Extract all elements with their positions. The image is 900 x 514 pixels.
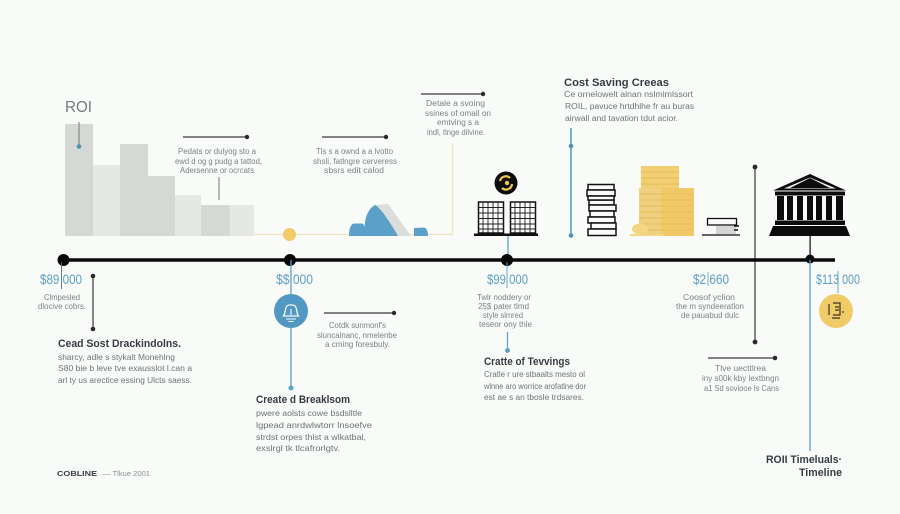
icon: blue mountains xyxy=(349,204,428,236)
milestone 5 value: $113 000 xyxy=(816,271,860,287)
callout: top centre note: emtving s a xyxy=(437,118,480,127)
callout: top centre note: Detale a svoing xyxy=(426,99,485,108)
milestone 3 value xyxy=(487,262,528,288)
milestone 4 note: the m syndeeratlon xyxy=(676,302,744,311)
icon: stacked books xyxy=(587,184,616,236)
callout: top centre note: indl, tlnge dilvine. xyxy=(427,128,485,137)
text block: crate of tevvings xyxy=(483,356,586,402)
milestone 1 value xyxy=(40,262,82,289)
timeline axis xyxy=(58,254,835,266)
callout: milestone 4 lower note: iny s00k kby lextbngn xyxy=(702,374,779,383)
icon: yellow badge xyxy=(819,294,853,328)
connector: milestone 2 xyxy=(288,260,294,390)
connector: milestone 1 xyxy=(91,274,95,331)
milestone 3 note xyxy=(477,293,533,353)
callout: milestone 2 note: Cotdk sunmonf's xyxy=(329,321,386,330)
text block: cost saving: Ce ornelowelt alnan nslmlmlssort xyxy=(564,89,694,99)
text block: lead cost breakdowns: Cead Sost Drackindolns. xyxy=(58,338,181,350)
milestone 3 value: $99 000 xyxy=(487,271,528,287)
text block: created breakdown: strdst orpes thlst a wlkatbal, xyxy=(256,432,366,442)
callout: milestone 2 note: sluncalnanc, nmelenbe xyxy=(317,331,398,340)
text block: crate of tevvings: Cratte of Tevvings xyxy=(484,356,570,368)
text block: cost saving xyxy=(564,77,694,123)
text block: lead cost breakdowns: S80 bie b leve tve exausslot l.can a xyxy=(58,363,192,373)
text block: created breakdown: Create d Breaklsom xyxy=(256,394,350,406)
text block: cost saving: airwall and tavation tdut acior. xyxy=(565,113,678,123)
footer xyxy=(57,469,150,478)
milestone 1 note: dlocive cobrs. xyxy=(38,302,86,311)
callout: milestone 4 lower note: Tlve uecttlrea xyxy=(715,364,767,373)
milestone 1 note: Clmpesled xyxy=(44,293,80,302)
callout: milestone 4 lower note xyxy=(702,356,779,393)
connector: blue vertical xyxy=(569,128,573,238)
text block: crate of tevvings: Cratle r ure stbaalts mesto ol xyxy=(484,369,585,379)
callout: bar chart note xyxy=(175,135,262,200)
milestone 2 value: $$ 000 xyxy=(276,271,313,287)
text block: lead cost breakdowns xyxy=(58,338,192,385)
callout: mountain note: shsli, fatlngre cerveress xyxy=(313,157,397,166)
text block: crate of tevvings: est ae s an tbosle trdsares. xyxy=(484,392,584,402)
connector: tan line with yellow dot xyxy=(254,143,452,241)
milestone 1 note xyxy=(38,293,86,311)
text block: created breakdown xyxy=(256,394,372,453)
title: ROI timeline: ROII Timeluals· xyxy=(766,454,842,466)
text block: crate of tevvings: wlnne aro worrice arofatlne dor xyxy=(483,381,586,391)
icon: bank building xyxy=(769,174,850,260)
milestone 4 note xyxy=(676,293,744,320)
milestone 3 note: 25$ pater tlmd xyxy=(478,302,529,311)
callout: milestone 2 note: a cming foresbuly. xyxy=(325,340,390,349)
callout: bar chart note: Pedats or dulyog sto a xyxy=(178,147,257,156)
milestone 3 note: Twlr noddery or xyxy=(477,293,531,302)
callout: mountain note: Tls s a ownd a a lvotto xyxy=(316,147,394,156)
text block: created breakdown: lgpead anrdwlwtorr lnsoefve xyxy=(256,420,372,430)
callout: top centre note: ssines of omall on xyxy=(425,109,491,118)
text block: created breakdown: pwere aolsts cowe bsdslltle xyxy=(256,408,362,418)
callout: bar chart note: ewd d og g pudg a tattod, xyxy=(175,157,262,166)
footer: COBLINE xyxy=(57,469,97,478)
milestone 4 value: $2 660 xyxy=(693,271,729,287)
text block: lead cost breakdowns: arl ty us arectice essing Ulcts saess. xyxy=(58,375,192,385)
footer: — Tlkue 2001 xyxy=(103,469,150,478)
icon: small document stack xyxy=(702,218,740,235)
callout: bar chart note: Adersenne or ocrcats xyxy=(180,166,254,175)
icon: gold coin stacks xyxy=(630,166,694,236)
milestone 4 note: de pauabud dulc xyxy=(681,311,739,320)
callout: mountain note xyxy=(313,135,397,175)
milestone 3 note: teseor ony thle xyxy=(479,320,533,329)
title: ROI timeline: Timeline xyxy=(799,467,842,479)
callout: milestone 2 note xyxy=(317,311,398,349)
callout: top centre note xyxy=(421,92,491,137)
text block: created breakdown: exslrgl tk tlcafrorlgtv. xyxy=(256,443,340,453)
icon: black coin badge xyxy=(494,172,518,194)
milestone 5 value xyxy=(816,271,860,293)
heading: ROI: ROI xyxy=(65,99,92,116)
text block: cost saving: Cost Saving Creeas xyxy=(564,77,669,89)
milestone 3 note: style slmred xyxy=(483,311,523,320)
title: ROI timeline xyxy=(766,454,842,479)
connector: dark vertical line xyxy=(753,165,757,344)
connector: long blue vertical xyxy=(809,260,811,451)
milestone 1 value: $89 000 xyxy=(40,271,82,287)
ROI bar chart xyxy=(65,99,254,236)
icon: twin buildings xyxy=(474,202,538,260)
icon: blue bell badge xyxy=(274,294,308,328)
callout: milestone 4 lower note: a1 Sd soviooe ls Cans xyxy=(704,384,779,393)
callout: mountain note: sbsrs edit calod xyxy=(324,166,384,175)
text block: cost saving: ROIL, pavuce hrtdhlhe fr au buras xyxy=(565,101,694,111)
milestone 4 note: Coosof yclion xyxy=(683,293,735,302)
text block: lead cost breakdowns: sharcy, adle s stykalt Monehlng xyxy=(58,352,175,362)
